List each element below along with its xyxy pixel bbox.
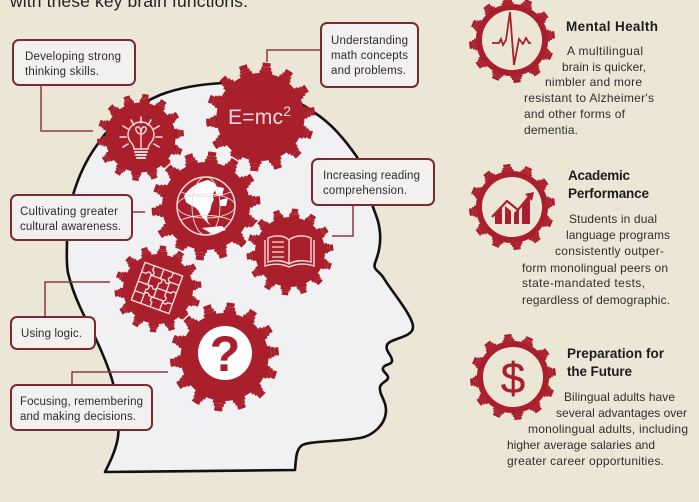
icon: globe bbox=[177, 177, 235, 235]
callout: logic bbox=[11, 317, 95, 349]
callout: focusing: Focusing, remembering bbox=[20, 396, 143, 408]
callout: reading: comprehension. bbox=[323, 185, 407, 197]
body text: brain is quicker, bbox=[562, 60, 646, 74]
icon: gear with bar chart bbox=[466, 161, 558, 253]
formula: 2 bbox=[283, 103, 291, 119]
panel: mental health bbox=[466, 0, 658, 137]
icon: question mark: ? bbox=[210, 326, 240, 382]
formula: E=mc bbox=[228, 106, 283, 129]
heading: Mental Health bbox=[566, 19, 658, 34]
panel: preparation for the future bbox=[467, 331, 688, 468]
body text: language programs bbox=[566, 228, 670, 242]
body text: nimbler and more bbox=[545, 75, 642, 89]
body text: Students in dual bbox=[569, 212, 657, 226]
callout: focusing: and making decisions. bbox=[20, 411, 136, 423]
callout: logic: Using logic. bbox=[21, 328, 82, 340]
gear: globe bbox=[149, 149, 263, 263]
callout: reading: Increasing reading bbox=[323, 170, 420, 182]
heading bbox=[568, 168, 649, 201]
body text: higher average salaries and bbox=[507, 438, 655, 452]
connector lines bbox=[41, 50, 353, 385]
body text: monolingual adults, including bbox=[528, 422, 688, 436]
icon: gear with dollar sign: $ bbox=[501, 354, 525, 403]
callout: thinking skills: Developing strong bbox=[25, 51, 121, 63]
body text: and other forms of bbox=[524, 107, 626, 121]
callout: reading bbox=[312, 159, 434, 205]
callout: thinking skills: thinking skills. bbox=[25, 66, 99, 78]
body text bbox=[524, 44, 654, 137]
callout: math: Understanding bbox=[331, 35, 408, 47]
callout: cultural awareness: cultural awareness. bbox=[20, 221, 121, 233]
icon: lightbulb bbox=[120, 117, 162, 158]
gear: book bbox=[244, 206, 336, 298]
head silhouette bbox=[67, 83, 413, 472]
callout: math: math concepts bbox=[331, 50, 408, 62]
body text: dementia. bbox=[524, 123, 578, 137]
body text: several advantages over bbox=[556, 406, 687, 420]
body text: Bilingual adults have bbox=[564, 390, 675, 404]
callout: math bbox=[321, 23, 418, 87]
body text: consistently outper- bbox=[555, 244, 664, 258]
icon: gear with dollar sign bbox=[467, 331, 559, 423]
heading: Performance bbox=[568, 186, 649, 201]
body text: A multilingual bbox=[567, 44, 643, 58]
heading: Preparation for bbox=[567, 346, 665, 361]
body text: form monolingual peers on bbox=[522, 261, 668, 275]
callout: focusing bbox=[11, 385, 152, 430]
gear: E=mc2 bbox=[203, 60, 318, 174]
callout: thinking skills bbox=[13, 40, 135, 85]
heading bbox=[567, 346, 665, 379]
callout: math: and problems. bbox=[331, 65, 406, 77]
body text: greater career opportunities. bbox=[507, 454, 664, 468]
icon: gear with heartbeat bbox=[466, 0, 558, 86]
body text bbox=[522, 212, 670, 307]
body text: resistant to Alzheimer's bbox=[524, 91, 654, 105]
gear: puzzle bbox=[112, 243, 204, 335]
panel: academic performance bbox=[466, 161, 670, 307]
gear: question mark bbox=[167, 300, 282, 414]
callout: cultural awareness bbox=[11, 195, 132, 240]
gear: lightbulb, thinking skills bbox=[95, 92, 186, 183]
body text: regardless of demographic. bbox=[522, 293, 670, 307]
body text: state-mandated tests, bbox=[522, 276, 645, 290]
heading: Academic bbox=[568, 168, 630, 183]
callout: cultural awareness: Cultivating greater bbox=[20, 206, 118, 218]
icon: open book bbox=[265, 236, 314, 267]
heading: the Future bbox=[567, 364, 632, 379]
body text bbox=[507, 390, 688, 468]
icon: jigsaw puzzle bbox=[131, 262, 183, 314]
